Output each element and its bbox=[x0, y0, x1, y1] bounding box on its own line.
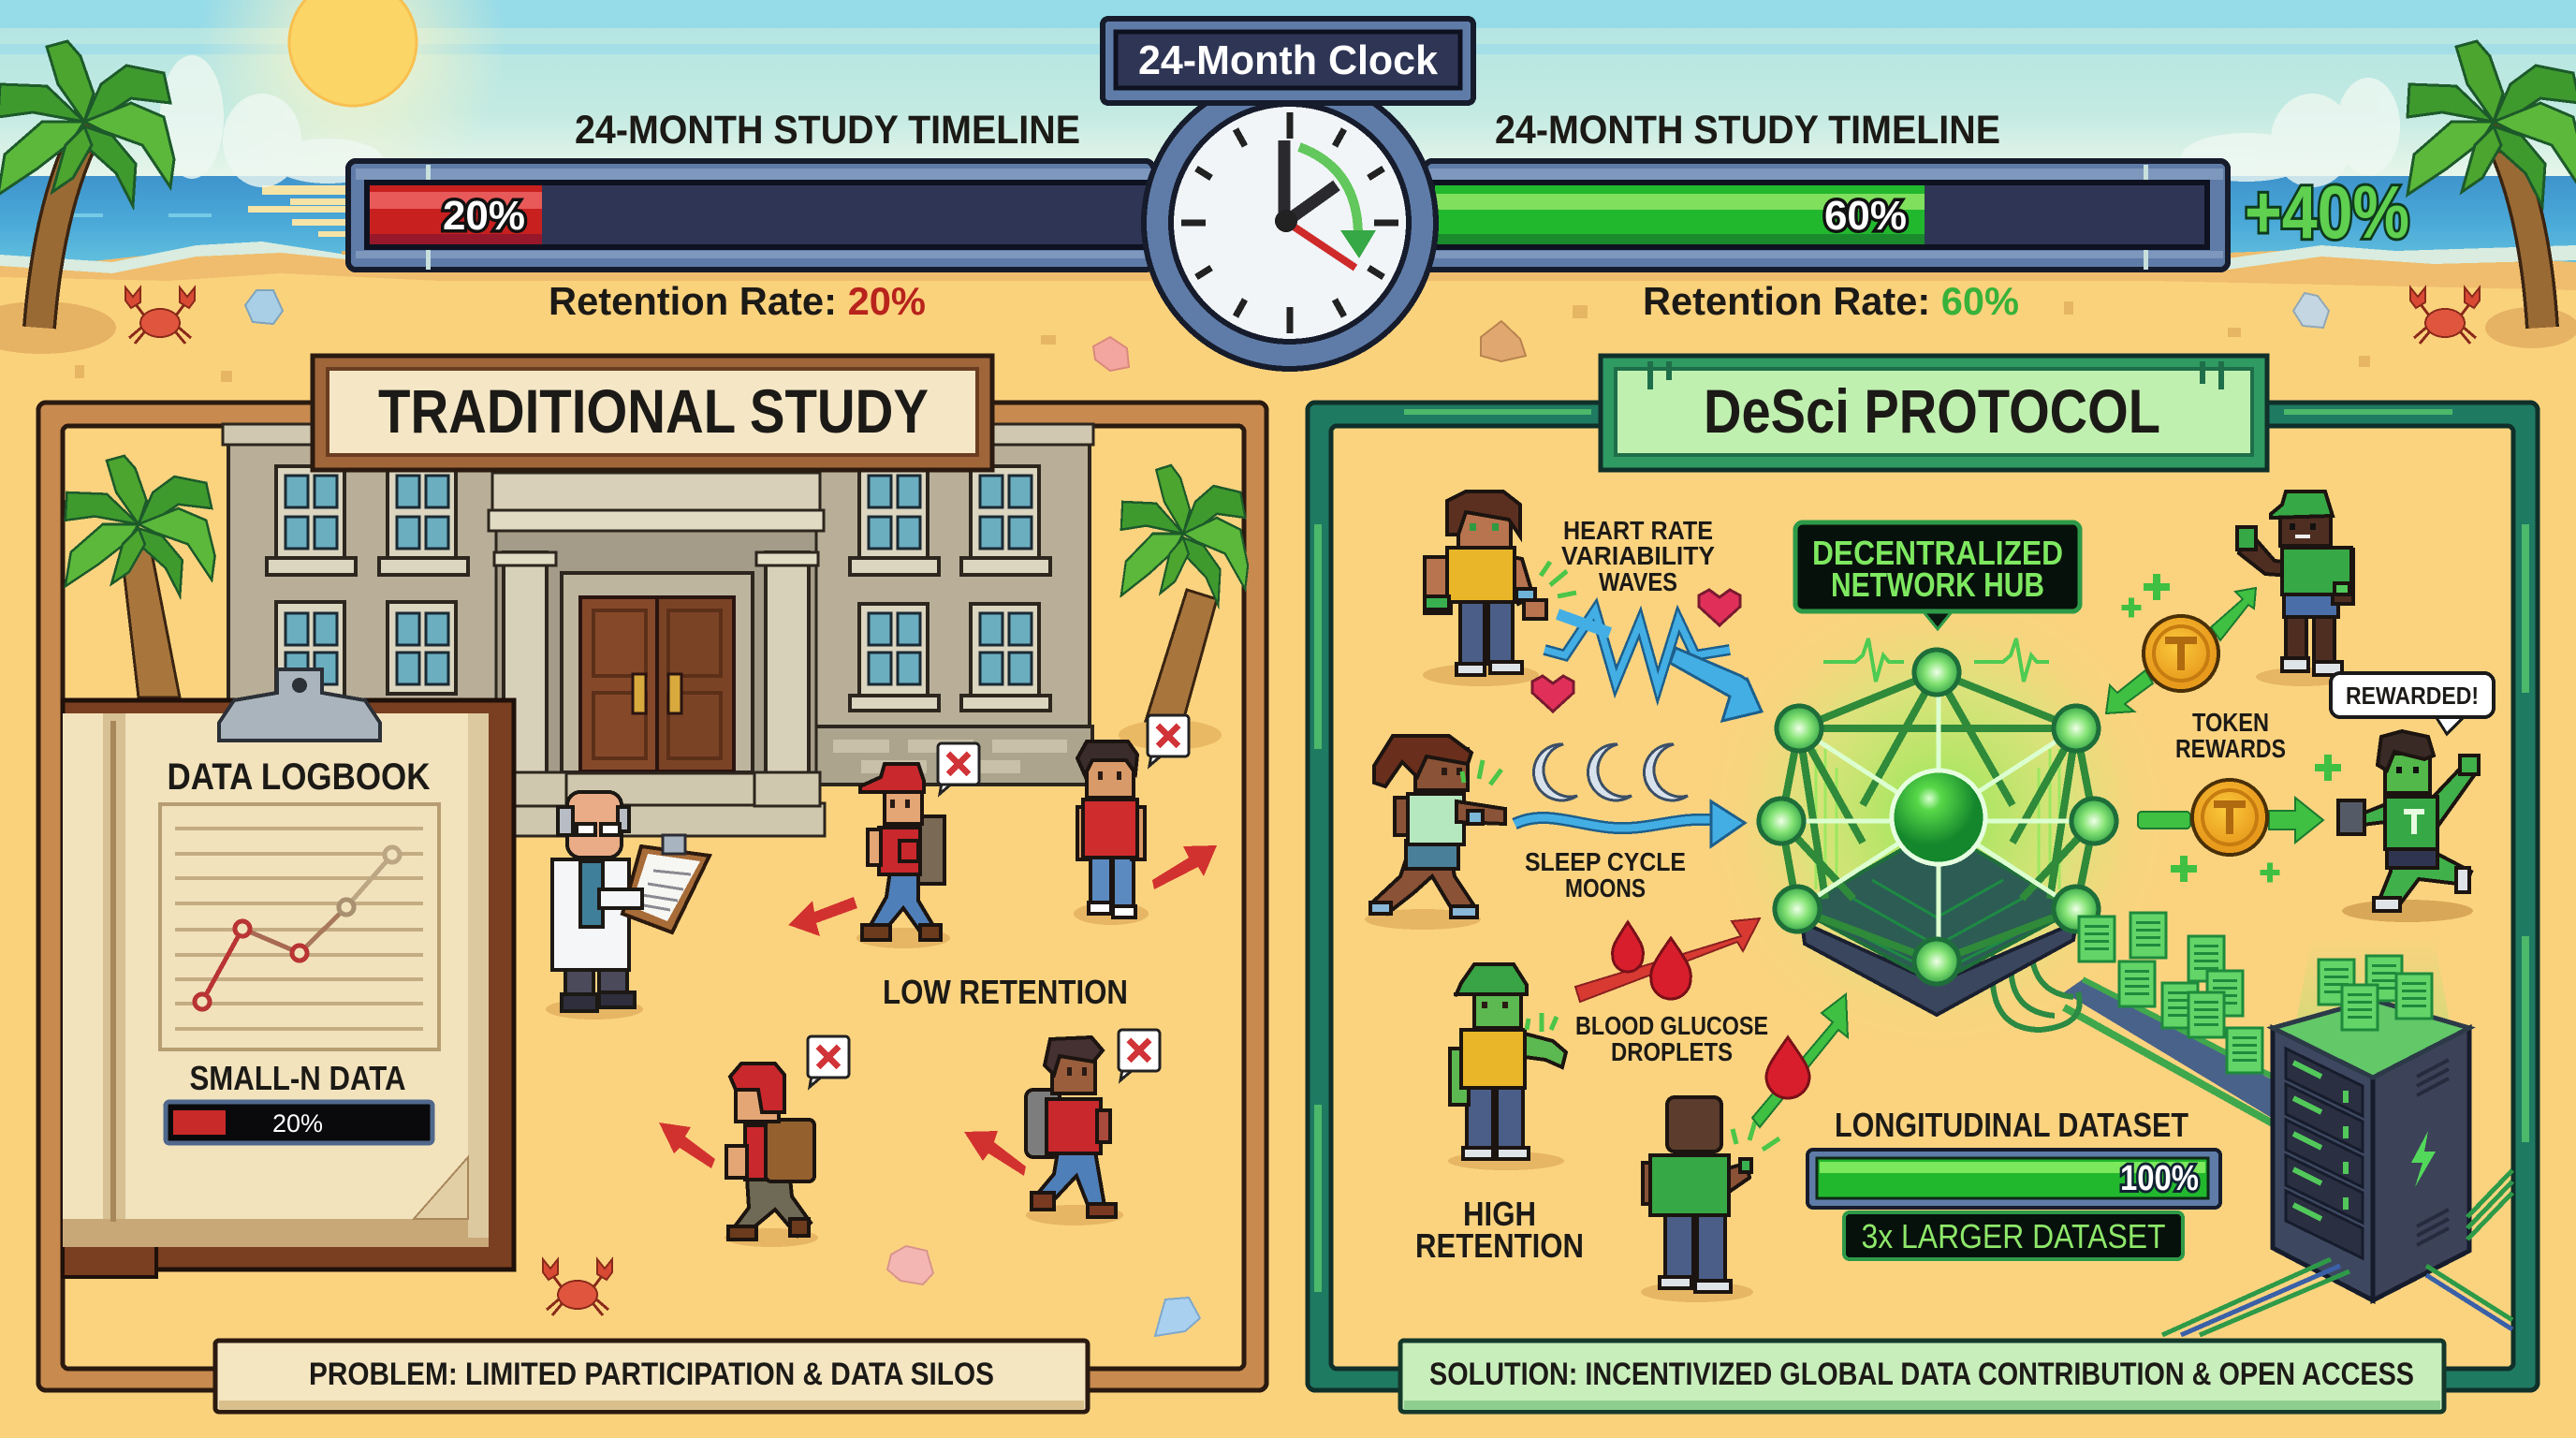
front steps bbox=[510, 772, 825, 836]
label: high retention: RETENTION bbox=[1415, 1226, 1584, 1265]
double doors bbox=[580, 597, 734, 771]
value: 20%: 20% bbox=[443, 193, 525, 239]
shell: tan, top centre bbox=[1481, 321, 1526, 361]
heading right: 24-month study timeline: 24-MONTH STUDY TIMELINE bbox=[1495, 108, 2000, 153]
core sphere bbox=[1892, 770, 1985, 864]
heart rate wave with arrow bbox=[1544, 610, 1762, 721]
caption: solution bbox=[1400, 1341, 2444, 1412]
hub nodes bbox=[1759, 650, 2116, 984]
callout: rewarded: REWARDED! bbox=[2346, 682, 2479, 710]
palm tree: panel right bbox=[1119, 465, 1248, 750]
shell: grey, top right bbox=[2293, 293, 2329, 328]
student leaving: red cap with backpack bbox=[856, 764, 950, 948]
mini bar: 20% bbox=[166, 1102, 432, 1143]
value: 100%: 100% bbox=[2120, 1159, 2199, 1198]
sun bbox=[198, 0, 507, 197]
hub label: DECENTRALIZED bbox=[1812, 534, 2063, 572]
shell: pink, top centre bbox=[1093, 337, 1129, 371]
value: 20%: 20% bbox=[272, 1109, 323, 1137]
clipboard clip bbox=[219, 669, 380, 741]
arrow: leaving up-left bbox=[964, 1131, 1026, 1176]
arrow: leaving left bbox=[788, 897, 857, 936]
palm tree: top left bbox=[0, 41, 174, 354]
student leaving: back view with brown backpack bbox=[724, 1064, 818, 1247]
participant: green cap bbox=[1448, 964, 1566, 1170]
network hub glow bbox=[1700, 579, 2177, 1056]
blood glucose arrow bbox=[1575, 918, 1760, 1002]
data logbook bbox=[63, 669, 514, 1277]
clock label bbox=[1103, 19, 1473, 103]
label: sleep cycle moons bbox=[1525, 847, 1686, 902]
windows bbox=[267, 466, 1050, 711]
sleep wave arrow bbox=[1515, 801, 1745, 846]
banner: DeSci protocol bbox=[1601, 356, 2267, 470]
pulse lines bbox=[1823, 638, 2049, 682]
cable to server bbox=[1993, 946, 2284, 1125]
student leaving: grey backpack bbox=[1026, 1037, 1123, 1225]
icon: heart lower bbox=[1532, 676, 1573, 712]
label: high retention bbox=[1415, 1195, 1584, 1265]
sleep cycle moons bbox=[1533, 744, 1688, 800]
network hub bbox=[1759, 638, 2116, 1015]
retention rate right: Retention Rate: 60% bbox=[1643, 279, 2019, 323]
label: small-n data: SMALL-N DATA bbox=[189, 1059, 406, 1097]
icon: X bubble bbox=[938, 743, 979, 794]
caption: problem: PROBLEM: LIMITED PARTICIPATION & DATA SILOS bbox=[309, 1357, 994, 1392]
banner: traditional study bbox=[313, 356, 992, 470]
label: heart rate variability waves: HEART RATE bbox=[1563, 516, 1713, 545]
hub label bbox=[1795, 522, 2080, 629]
callout: 3x larger dataset: 3x LARGER DATASET bbox=[1861, 1217, 2166, 1255]
label: heart rate variability waves bbox=[1561, 516, 1715, 596]
participant: rewarded runner bbox=[2338, 731, 2479, 922]
reward sparks bbox=[2121, 574, 2341, 882]
icon: heart upper bbox=[1699, 590, 1740, 625]
student leaving: standing bbox=[1074, 741, 1149, 925]
label: heart rate variability waves: WAVES bbox=[1599, 567, 1677, 596]
label: blood glucose droplets: BLOOD GLUCOSE bbox=[1575, 1011, 1768, 1040]
palm tree: panel left bbox=[66, 456, 215, 697]
label: longitudinal dataset: LONGITUDINAL DATASET bbox=[1835, 1106, 2188, 1144]
label: heart rate variability waves: VARIABILITY bbox=[1561, 541, 1715, 570]
label: high retention: HIGH bbox=[1463, 1195, 1536, 1233]
clock bbox=[1144, 77, 1436, 369]
palm tree: top right bbox=[2408, 41, 2576, 348]
icon: lightning bolt bbox=[2411, 1131, 2436, 1187]
icon: blood droplets bbox=[1613, 922, 1690, 999]
token coin: lower with arrow bbox=[2138, 780, 2323, 855]
participant: back view, green shirt bbox=[1641, 1097, 1779, 1302]
data documents bbox=[2079, 913, 2262, 1073]
icon: X bubble bbox=[1148, 715, 1189, 766]
participant: green cap waving bbox=[2237, 492, 2353, 686]
icon: X bubble bbox=[1119, 1030, 1160, 1080]
icon: X bubble bbox=[808, 1036, 849, 1087]
clipboard bbox=[622, 835, 710, 932]
line chart bbox=[160, 804, 439, 1049]
progress bar: traditional study 20% bbox=[348, 161, 1153, 270]
scientist with clipboard bbox=[546, 792, 710, 1020]
server wires bbox=[2162, 1170, 2512, 1335]
crab: lower panel bbox=[543, 1259, 612, 1315]
callout: rewarded bbox=[2331, 673, 2494, 734]
label: sleep cycle moons: MOONS bbox=[1565, 873, 1646, 902]
participant: heart rate wearer bbox=[1423, 492, 1576, 686]
crab: top right bbox=[2410, 287, 2480, 344]
icon: green elapsed-time arrow bbox=[1299, 147, 1376, 258]
panel: DeSci protocol bbox=[1308, 403, 2538, 1390]
panel: traditional study bbox=[38, 403, 1266, 1390]
portico and columns bbox=[489, 473, 824, 784]
progress bar: longitudinal dataset 100% bbox=[1808, 1150, 2220, 1208]
heading left: 24-month study timeline: 24-MONTH STUDY TIMELINE bbox=[575, 108, 1080, 153]
caption: problem bbox=[215, 1341, 1088, 1412]
caption: solution: SOLUTION: INCENTIVIZED GLOBAL DATA CONTRIBUTION & OPEN ACCESS bbox=[1429, 1357, 2414, 1392]
label: blood glucose droplets: DROPLETS bbox=[1611, 1037, 1733, 1066]
side light stripes bbox=[1816, 749, 2059, 889]
shell: blue, top left bbox=[245, 290, 283, 324]
arrow: leaving up-left bbox=[659, 1123, 715, 1168]
value: 60%: 60% bbox=[1824, 193, 1907, 239]
retention rate left: Retention Rate: 20% bbox=[549, 279, 926, 323]
participant: runner with ponytail bbox=[1365, 736, 1505, 930]
callout: +40% gain: +40% bbox=[2245, 170, 2409, 254]
heading: data logbook: DATA LOGBOOK bbox=[167, 756, 431, 798]
label: low retention: LOW RETENTION bbox=[883, 973, 1128, 1011]
upload arrow with droplet bbox=[1752, 994, 1848, 1127]
label: token rewards: REWARDS bbox=[2175, 734, 2286, 763]
clock label: 24-Month Clock bbox=[1138, 37, 1439, 83]
token coin: upper with double arrow bbox=[2106, 588, 2256, 713]
clouds bbox=[160, 55, 2400, 187]
label: token rewards: TOKEN bbox=[2192, 708, 2269, 737]
label: blood glucose droplets bbox=[1575, 1011, 1768, 1066]
crab: top left bbox=[125, 287, 195, 344]
building bbox=[223, 424, 1093, 836]
shell: blue bbox=[1155, 1298, 1200, 1336]
data server bbox=[2273, 936, 2469, 1300]
hub label: NETWORK HUB bbox=[1831, 565, 2044, 604]
hub base bbox=[1802, 922, 2076, 1015]
label: sleep cycle moons: SLEEP CYCLE bbox=[1525, 847, 1686, 876]
banner: DeSci protocol: DeSci PROTOCOL bbox=[1704, 376, 2160, 446]
label: token rewards bbox=[2175, 708, 2286, 763]
shell: pink bbox=[887, 1246, 933, 1284]
arrow: leaving up-right bbox=[1152, 845, 1217, 889]
progress bar: DeSci protocol 60% bbox=[1425, 161, 2228, 270]
banner: traditional study: TRADITIONAL STUDY bbox=[378, 376, 929, 446]
